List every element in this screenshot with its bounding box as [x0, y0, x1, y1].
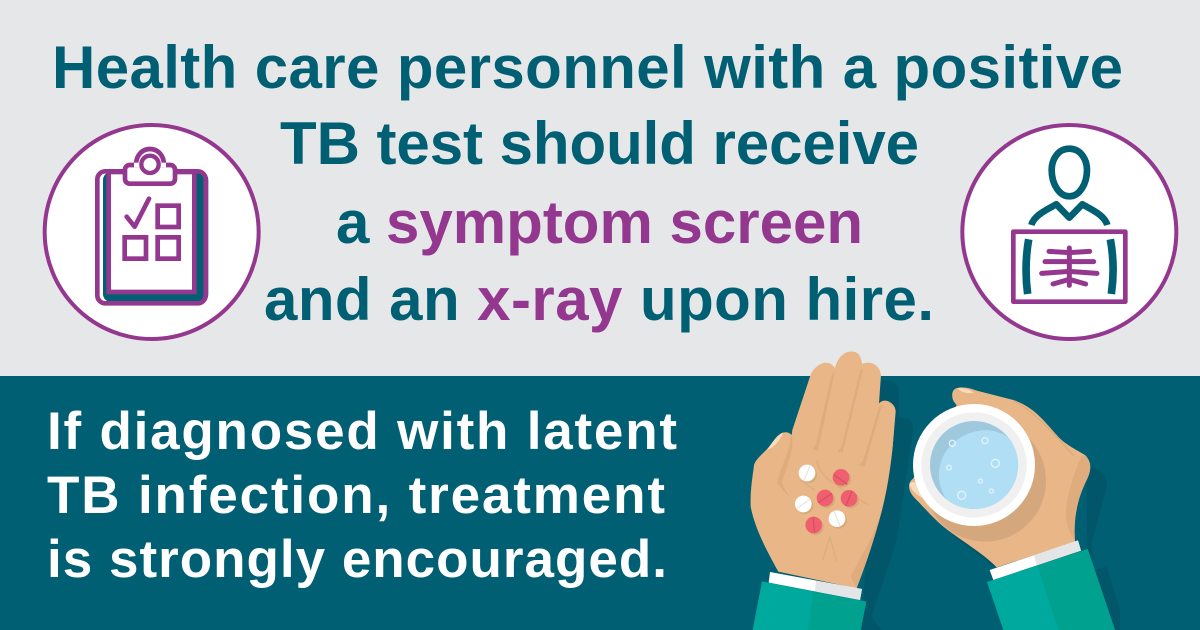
glass shadow on palm: [924, 420, 1046, 542]
text block: treatment message: If diagnosed with latent: [47, 402, 677, 461]
thumb nail: [767, 432, 783, 450]
hand shading: [1066, 455, 1090, 542]
pills: [795, 465, 859, 535]
glass rim: [913, 404, 1035, 526]
heading: main message: a symptom screen: [336, 189, 863, 256]
cuff: [769, 572, 862, 600]
cuff: [990, 540, 1081, 580]
illustration: right hand holding glass of water: [909, 387, 1120, 630]
sleeve: [753, 581, 866, 630]
illustration: left hand holding pills: [751, 352, 913, 630]
heading: main message: [52, 34, 1123, 333]
bubbles: [947, 438, 999, 499]
hand: [751, 352, 896, 588]
hand creases: [777, 368, 896, 588]
heading: main message: and an x-ray upon hire.: [264, 266, 934, 333]
panel: bottom teal background: [0, 376, 1200, 630]
heading: main message: TB test should receive: [280, 110, 919, 177]
panel: top grey background: [0, 0, 1200, 376]
sleeve: [987, 549, 1115, 630]
icon: clipboard checklist in circle: [45, 125, 259, 339]
finger nails: [909, 388, 974, 498]
text block: treatment message: TB infection, treatment: [47, 466, 665, 525]
icon: person holding chest x-ray in circle: [962, 125, 1176, 339]
water: [930, 421, 1018, 509]
hand shadow: [950, 463, 1120, 630]
hand shadow: [862, 380, 913, 630]
fingers and hand: [909, 387, 1090, 567]
heading: main message: Health care personnel with a positive: [52, 34, 1123, 101]
text block: treatment message: [47, 402, 677, 589]
text block: treatment message: is strongly encouraged.: [47, 530, 667, 589]
